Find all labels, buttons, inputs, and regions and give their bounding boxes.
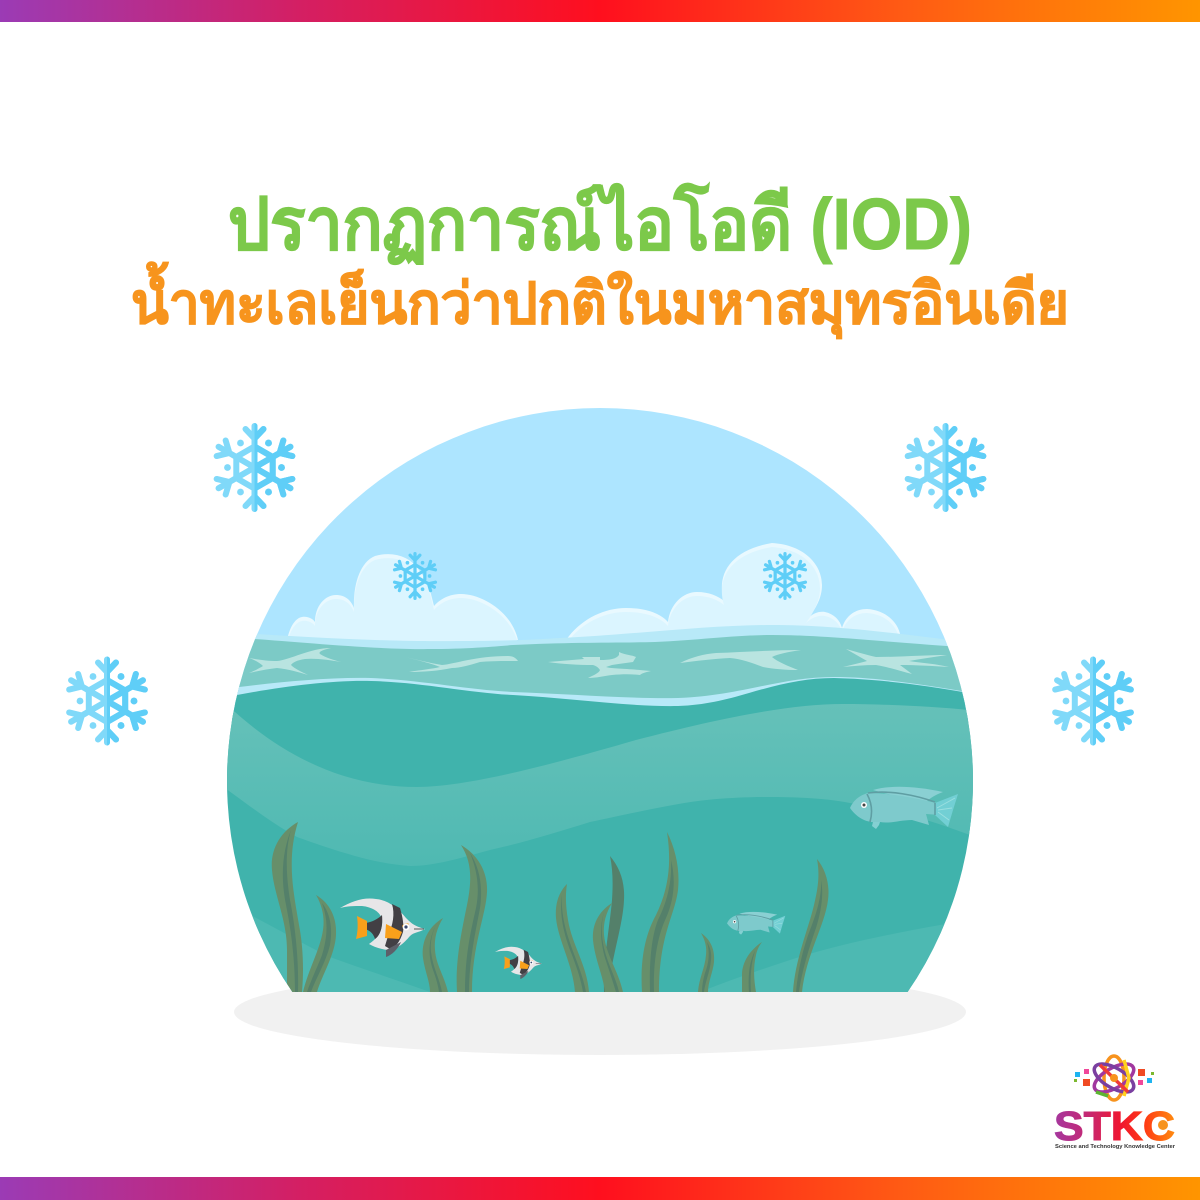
subtitle: น้ำทะเลเย็นกว่าปกติในมหาสมุทรอินเดีย — [131, 262, 1069, 340]
angelfish large — [340, 898, 425, 957]
seaweed blade 6 dark — [604, 856, 624, 992]
logo wordmark: STKC — [1054, 1103, 1175, 1149]
deep water — [225, 678, 980, 1000]
seaweed blade 10 — [742, 942, 762, 992]
snowflake top left — [214, 426, 295, 509]
snowflake middle right — [1053, 660, 1133, 742]
seaweed blade 8 — [642, 832, 679, 992]
snowflake top right — [905, 426, 986, 509]
ocean globe scene — [220, 400, 980, 1000]
top gradient bar — [0, 0, 1200, 22]
far water — [225, 635, 980, 720]
logo pixel squares — [1074, 1069, 1154, 1086]
seaweed blade 9 — [698, 933, 714, 992]
seaweed — [272, 822, 829, 992]
lighter mid-water layer — [225, 704, 980, 866]
logo atom mark — [1090, 1056, 1138, 1100]
sea surface highlight — [225, 625, 980, 665]
blue fish large — [850, 787, 958, 829]
seaweed blade 3 — [423, 918, 448, 992]
ground shadow — [234, 969, 966, 1055]
near water light strip — [237, 677, 962, 706]
blue fish small — [727, 912, 785, 935]
angelfish small — [495, 947, 542, 979]
seaweed blade 1 — [272, 822, 303, 992]
logo tagline: Science and Technology Knowledge Center — [1055, 1144, 1176, 1150]
seaweed blade 5 — [556, 884, 589, 992]
STKC logo — [1054, 1056, 1176, 1150]
snowflake on right cloud — [763, 554, 807, 598]
seaweed blade 11 — [793, 859, 829, 992]
sky — [220, 400, 980, 700]
seaweed blade 2 — [303, 895, 336, 992]
logo dot — [1158, 1120, 1168, 1130]
wave highlights — [249, 648, 949, 678]
snowflake middle left — [67, 660, 147, 742]
title: main heading: ปรากฏการณ์ไอโอดี (IOD) — [228, 181, 972, 265]
cloud left — [288, 554, 518, 646]
lower-left light water — [252, 916, 429, 992]
snowflake on left cloud — [393, 554, 437, 598]
cloud right — [568, 543, 900, 638]
seaweed blade 4 — [457, 845, 487, 992]
seaweed blade 7 — [593, 903, 623, 992]
bottom gradient bar — [0, 1177, 1200, 1200]
lower-right light water — [708, 924, 944, 992]
